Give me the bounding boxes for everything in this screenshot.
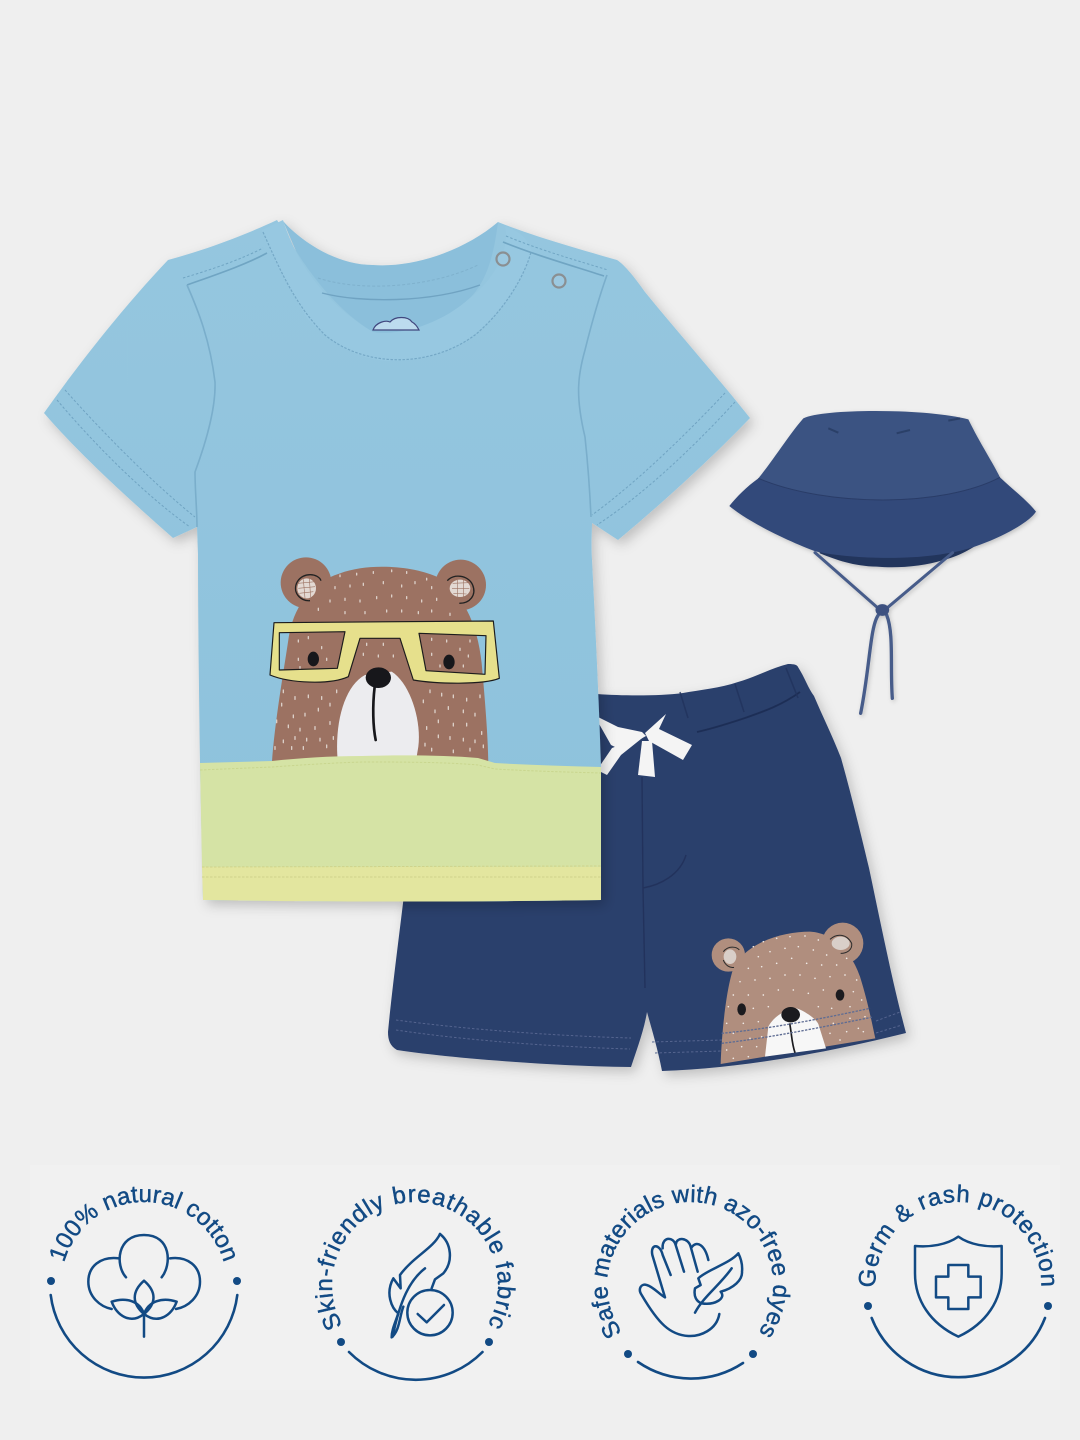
- collar stitching: [263, 232, 531, 360]
- nose: [366, 667, 391, 688]
- crown top fold: [828, 418, 960, 433]
- brim: [729, 477, 1036, 558]
- green band: [200, 755, 601, 868]
- shirt bear print: [270, 557, 499, 767]
- chin strap: [815, 553, 953, 713]
- label: Skin-friendly breathable fabric: [314, 1186, 516, 1330]
- left hem stitch: [396, 1020, 631, 1049]
- shirt body: [44, 220, 750, 902]
- under brim: [817, 530, 997, 567]
- fly seam: [642, 777, 686, 988]
- waistband seam: [697, 692, 800, 732]
- right hem stitch: [652, 1012, 902, 1053]
- collar ring: [262, 220, 532, 361]
- yellow glasses: [270, 621, 499, 683]
- shorts bear print: [712, 923, 875, 1064]
- ear patches: [295, 575, 474, 603]
- left sleeve hem stitch: [57, 390, 195, 527]
- back neck inside: [283, 221, 510, 345]
- right yoke seam: [503, 242, 604, 276]
- drawstring bow: [597, 714, 692, 777]
- badge: 100% natural cotton: [47, 1186, 241, 1379]
- neck label: [373, 318, 419, 330]
- ears: [281, 557, 331, 608]
- label: Safe materials with azo-free dyes: [591, 1184, 790, 1338]
- fur flecks: [275, 570, 483, 753]
- blue t-shirt: [44, 220, 750, 902]
- icon: cotton boll: [88, 1235, 200, 1337]
- icon: hand and feather: [640, 1239, 742, 1336]
- badge: germ and rash protection: [858, 1184, 1054, 1378]
- icon: shield with cross: [915, 1237, 1002, 1337]
- bucket hat: [729, 411, 1036, 713]
- navy shorts: [388, 664, 906, 1071]
- badge: skin-friendly breathable fabric: [314, 1186, 516, 1382]
- badge strip background: [30, 1165, 1060, 1390]
- shoulder snaps: [496, 252, 510, 266]
- label: Germ & rash protection: [858, 1184, 1054, 1286]
- badge: safe materials with azo-free dyes: [591, 1184, 790, 1380]
- crown: [758, 411, 1000, 501]
- right sleeve seam: [579, 275, 607, 517]
- left sleeve seam: [187, 285, 215, 527]
- snout: [337, 672, 419, 767]
- left yoke seam: [187, 253, 267, 285]
- eyes: [308, 652, 319, 666]
- icon: feather with check: [389, 1234, 453, 1337]
- head: [272, 567, 488, 767]
- green band and yellow hem: [200, 755, 601, 902]
- yellow hem: [202, 867, 601, 902]
- right sleeve hem stitch: [592, 393, 735, 525]
- label: 100% natural cotton: [50, 1186, 235, 1262]
